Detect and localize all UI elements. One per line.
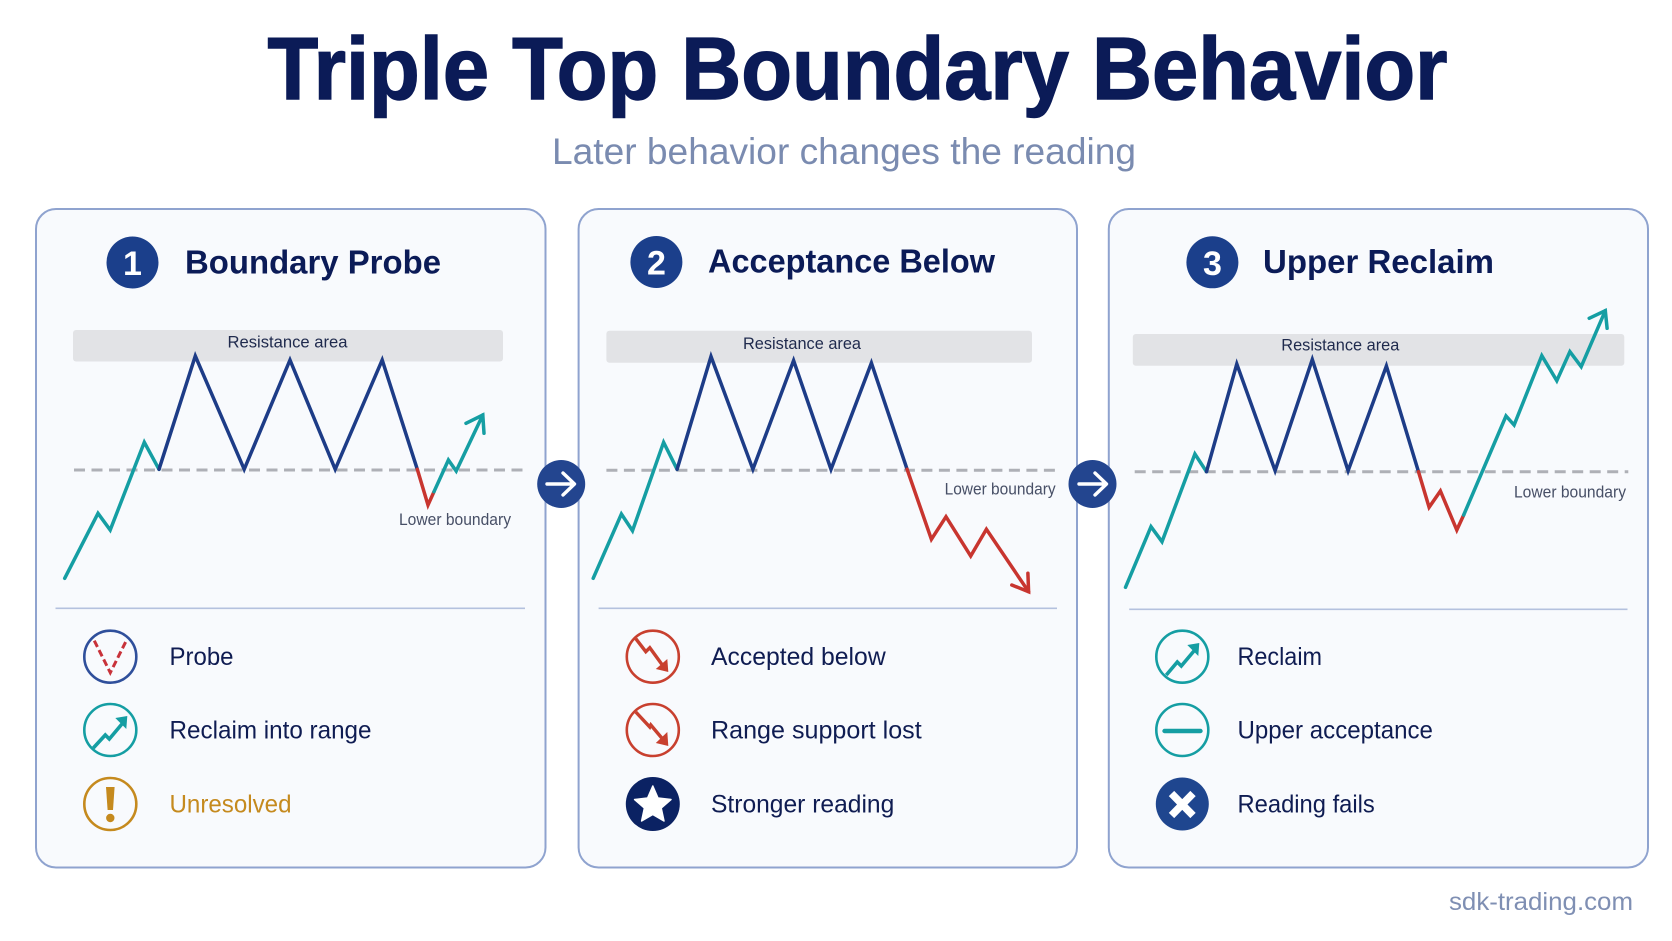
row: Upper acceptance [1156,704,1433,756]
row: Stronger reading [626,777,894,831]
row: Probe: Probe [170,643,234,671]
row: Range support lost [627,704,922,756]
step badge 3 [1186,236,1238,288]
row: Reclaim [1156,631,1322,683]
chart: boundary probe: Lower boundary [399,511,512,529]
heading: Acceptance Below: Acceptance Below [708,243,995,280]
row: Reclaim: Reclaim [1238,643,1322,671]
step badge 2: 2 [647,244,666,282]
chart: upper reclaim [1126,311,1628,587]
arrow: panel 1 to panel 2 [537,460,585,508]
row: Reclaim into range [84,704,372,756]
row: Reading fails [1156,778,1375,830]
heading: Boundary Probe: Boundary Probe [185,244,441,280]
row: Unresolved [84,778,292,830]
step badge 1 [106,236,158,288]
subtitle: Later behavior changes the reading [552,131,1136,172]
panel: upper reclaim [1109,209,1648,868]
chart: upper reclaim: Resistance area [1281,335,1400,354]
arrow: panel 2 to panel 3 [1068,460,1116,508]
row: Accepted below: Accepted below [711,643,887,671]
chart: boundary probe: Resistance area [228,332,348,352]
row: Range support lost: Range support lost [711,716,922,744]
title: Triple Top Boundary Behavior [268,19,1448,118]
panel: acceptance below [579,209,1077,868]
step badge 1: 1 [123,245,142,283]
row: Stronger reading: Stronger reading [711,791,894,819]
row: Unresolved: Unresolved [170,791,292,819]
step badge 3: 3 [1203,245,1222,283]
row: Upper acceptance: Upper acceptance [1238,716,1433,744]
chart: acceptance below: Lower boundary [945,480,1056,498]
row: Accepted below [627,631,887,683]
chart: acceptance below: Resistance area [743,334,862,353]
footer: website: sdk-trading.com [1449,888,1633,916]
row: Reclaim into range: Reclaim into range [170,716,372,744]
step badge 2 [630,236,682,288]
heading: Upper Reclaim: Upper Reclaim [1263,243,1494,280]
row: Reading fails: Reading fails [1238,791,1375,819]
chart: upper reclaim: Lower boundary [1514,483,1627,501]
row: Probe [84,631,234,683]
chart: acceptance below [593,331,1056,592]
chart: boundary probe [65,330,525,578]
panel: boundary probe [36,209,546,868]
